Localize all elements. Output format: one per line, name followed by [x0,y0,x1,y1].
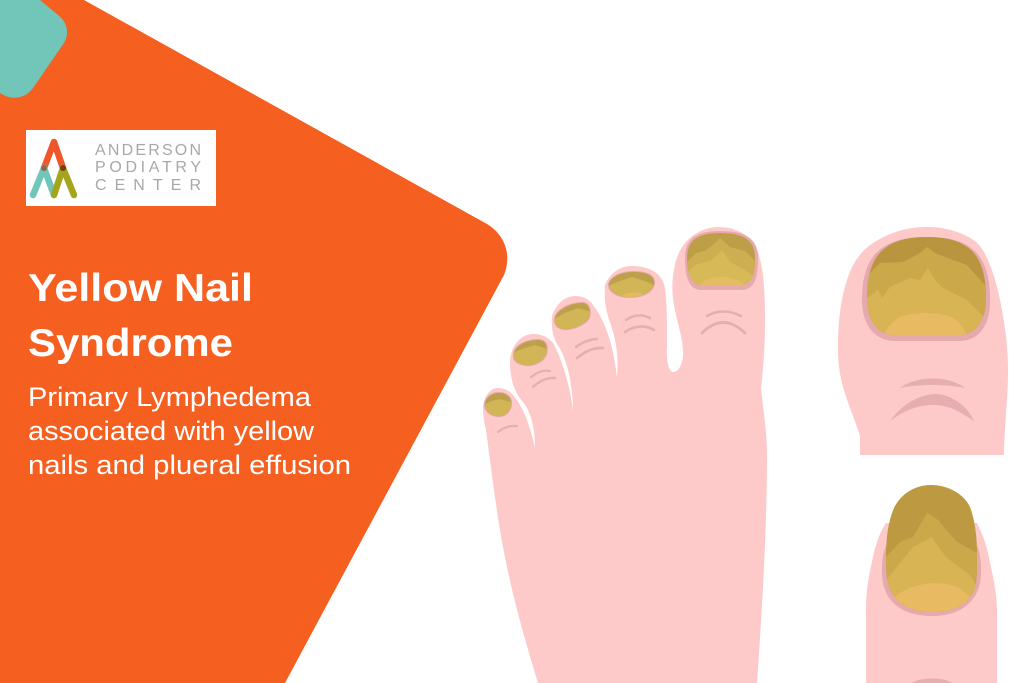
subtitle: Primary Lymphedema [28,382,311,412]
creases [900,379,965,388]
nail layers [884,483,980,615]
foot illustration [483,227,767,683]
nail border [882,545,981,616]
toe 1 nail [685,231,758,290]
toe shape [866,523,997,683]
crease [912,678,952,683]
orange background panel [0,0,507,683]
toe creases [498,312,745,432]
enlarged small toe [866,483,997,683]
logo [26,130,216,206]
logo wordmark: PODIATRY [95,159,201,176]
title [28,267,253,365]
toe shape [838,227,1008,455]
teal corner shape [0,0,67,98]
nail layers [867,237,986,335]
enlarged big toe [838,227,1008,455]
nail border [862,237,990,341]
toe 3 nail [554,302,591,330]
logo wordmark [95,142,201,194]
logo wordmark: ANDERSON [95,142,201,159]
toe 4 nail [513,339,548,366]
logo mark [33,142,74,195]
subtitle: nails and plueral effusion [28,450,351,480]
title: Yellow Nail [28,267,253,310]
logo wordmark: CENTER [95,177,201,194]
toe 2 nail [608,271,655,298]
title: Syndrome [28,322,233,365]
toe 5 nail [484,392,512,418]
foot silhouette [483,227,767,683]
subtitle: associated with yellow [28,416,315,446]
subtitle [28,382,351,480]
